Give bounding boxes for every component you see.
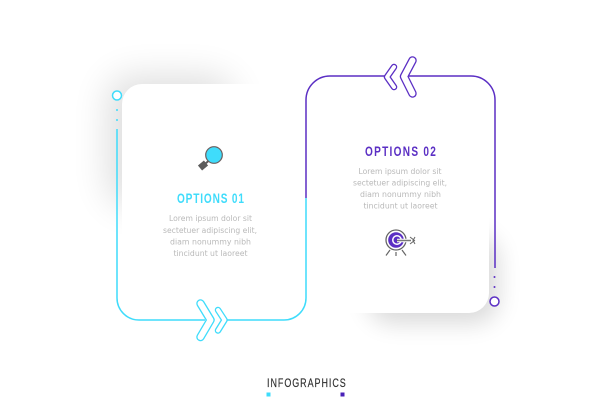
- arrow: purple double chevron: [387, 60, 412, 94]
- purple outline of option 02: [306, 76, 495, 268]
- panel: option 01 card: [122, 84, 312, 320]
- purple legend square: [340, 392, 344, 396]
- text block: option 01 body: Lorem ipsum dolor sit: [169, 213, 253, 223]
- text block: option 02 body: sectetuer adipiscing elit,: [353, 178, 447, 188]
- purple dots: [494, 276, 496, 288]
- text block: option 01 body: [163, 213, 257, 258]
- text block: option 02 body: tincidunt ut laoreet: [364, 200, 438, 210]
- cyan legend square: [266, 392, 270, 396]
- arrow: cyan double chevron: [200, 304, 224, 337]
- heading: options 02: OPTIONS 02: [365, 143, 436, 159]
- text block: option 02 body: [353, 166, 447, 210]
- text block: option 02 body: diam nonummy nibh: [360, 189, 441, 199]
- cyan outline of option 01: [117, 129, 306, 320]
- footer title: INFOGRAPHICS: [267, 378, 346, 390]
- icon: target with arrow: [386, 230, 415, 256]
- heading: options 01: OPTIONS 01: [177, 190, 244, 206]
- panel: option 02 card: [306, 76, 489, 313]
- text block: option 01 body: sectetuer adipiscing elit,: [163, 225, 257, 235]
- panel: option 01 card shadow: [108, 76, 233, 206]
- text block: option 02 body: Lorem ipsum dolor sit: [358, 166, 442, 176]
- icon: cyan circle marker: [112, 91, 122, 100]
- icon: magnifying glass: [200, 147, 222, 168]
- cyan dots: [116, 109, 118, 121]
- icon: purple circle marker: [490, 297, 499, 306]
- text block: option 01 body: diam nonummy nibh: [170, 236, 251, 246]
- text block: option 01 body: tincidunt ut laoreet: [174, 248, 248, 258]
- panel: option 02 card shadow: [368, 235, 498, 323]
